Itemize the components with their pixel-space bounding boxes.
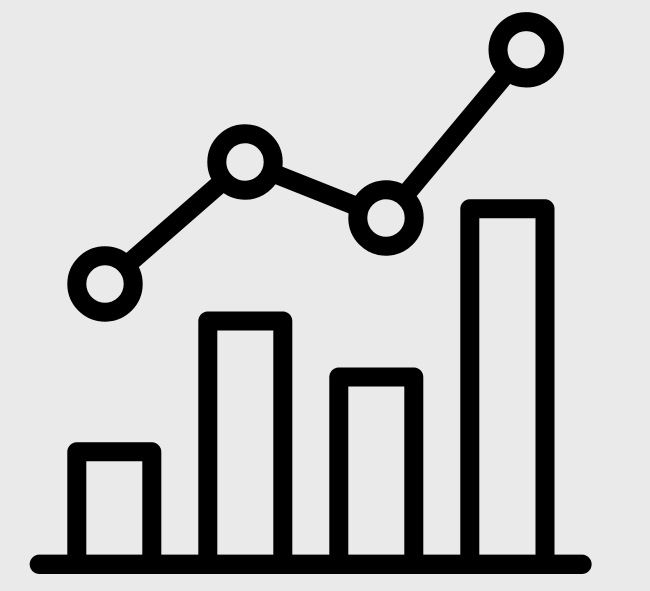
segment 3 <box>386 50 526 218</box>
segment 1 <box>105 162 245 284</box>
bar chart <box>77 209 545 564</box>
baseline axis <box>39 555 582 574</box>
point 2 <box>217 134 273 190</box>
point 1 <box>77 256 133 312</box>
bar 1 <box>77 452 152 564</box>
trend line <box>105 50 526 284</box>
segment 2 <box>245 162 386 218</box>
point 3 <box>358 190 414 246</box>
bar 2 <box>208 321 283 564</box>
bar 4 <box>470 209 545 564</box>
data points <box>77 22 554 312</box>
bar 3 <box>339 377 414 564</box>
point 4 <box>498 22 554 78</box>
